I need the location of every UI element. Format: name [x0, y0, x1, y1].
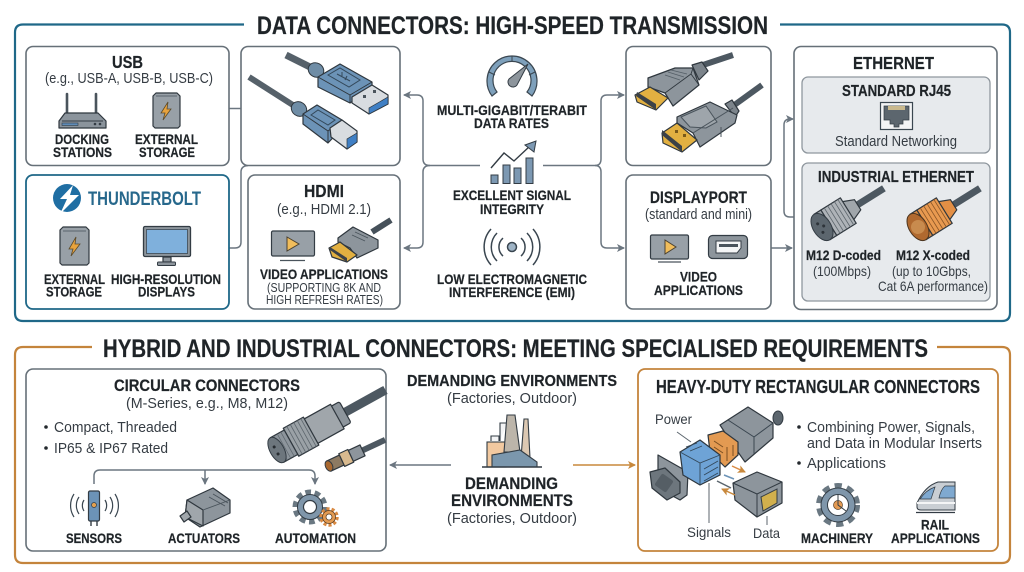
- text: HDMI version: (e.g., HDMI 2.1): [277, 201, 371, 218]
- icon: high-resolution monitor: [144, 226, 190, 266]
- text: signal integrity: [453, 187, 571, 217]
- label: video applications: VIDEO: [680, 268, 717, 284]
- label: M12 D-coded: (100Mbps): [813, 263, 871, 279]
- panel: data connectors: [15, 12, 1010, 321]
- icon: DisplayPort socket: [708, 236, 748, 258]
- label: actuators: ACTUATORS: [168, 530, 240, 546]
- panel outline: data connectors: [15, 24, 1010, 321]
- text: M-series: (M-Series, e.g., M8, M12): [126, 395, 288, 412]
- icon: docking station router: [59, 94, 106, 128]
- label: high-resolution displays: [111, 271, 221, 300]
- label: M12 D-coded: M12 D-coded: [806, 247, 881, 263]
- label: rail applications: RAIL: [921, 516, 949, 532]
- icon: actuator motor: [180, 488, 230, 527]
- label: M12 X-coded: Cat 6A performance): [878, 278, 988, 294]
- text: video applications: [260, 266, 388, 307]
- text: low EMI: [437, 271, 587, 300]
- label: external storage: EXTERNAL: [135, 131, 198, 147]
- heading: circular connectors: CIRCULAR CONNECTORS: [114, 376, 300, 395]
- text: video applications: HIGH REFRESH RATES): [266, 292, 383, 307]
- label: docking stations: STATIONS: [53, 144, 112, 160]
- panel: Thunderbolt: [26, 175, 229, 309]
- text: data rates: DATA RATES: [474, 115, 549, 131]
- label: rail applications: [891, 516, 980, 546]
- bullet list: heavy-duty features: [797, 419, 982, 472]
- subpanel: industrial Ethernet: [802, 163, 990, 301]
- text: demanding environments bottom: [447, 474, 577, 527]
- logo: Thunderbolt: THUNDERBOLT: [88, 189, 201, 210]
- bullet list: circular features: [44, 419, 177, 457]
- text: standard and mini: (standard and mini): [645, 207, 752, 223]
- subpanel: standard RJ45: [802, 77, 990, 153]
- heading: USB: USB: [112, 52, 143, 72]
- label: rail applications: APPLICATIONS: [891, 530, 980, 546]
- icon: large circular connector: [263, 376, 393, 467]
- text: data rates: [437, 102, 587, 131]
- label: signals: Signals: [687, 524, 731, 540]
- heading: DisplayPort: DISPLAYPORT: [650, 188, 747, 207]
- label: signals: [687, 483, 731, 540]
- heading: standard RJ45: STANDARD RJ45: [842, 83, 951, 100]
- panel: USB: [26, 46, 229, 166]
- icon: modular connector assembly: [650, 407, 783, 517]
- panel outline: hybrid and industrial: [15, 347, 1010, 563]
- panel: DisplayPort: [626, 175, 771, 309]
- icon: video screen: [272, 231, 314, 260]
- bullet list: heavy-duty features: Combining Power, Signals,: [807, 419, 975, 436]
- icon: small circular connector: [323, 433, 388, 474]
- text: USB types: (e.g., USB-A, USB-B, USB-C): [45, 70, 213, 87]
- text: data rates: MULTI-GIGABIT/TERABIT: [437, 102, 587, 118]
- text: demanding environments bottom: (Factories, Outdoor): [447, 510, 577, 527]
- heading: Ethernet: ETHERNET: [853, 53, 934, 73]
- text: low EMI: LOW ELECTROMAGNETIC: [437, 271, 587, 287]
- label: high-resolution displays: DISPLAYS: [138, 284, 195, 300]
- heading: HDMI: HDMI: [304, 181, 344, 201]
- text: signal integrity: INTEGRITY: [480, 201, 545, 217]
- text: signal integrity: EXCELLENT SIGNAL: [453, 187, 571, 203]
- text: demanding environments bottom: ENVIRONMENTS: [451, 491, 573, 510]
- label: power: Power: [655, 411, 692, 427]
- icon: DisplayPort plug: [662, 85, 762, 152]
- column: central benefits: [437, 56, 587, 300]
- icon: USB-B plug: [249, 77, 357, 149]
- panel: USB cables image: [241, 46, 400, 166]
- icon: speed gauge: [487, 56, 537, 96]
- icon: factory: [482, 415, 542, 467]
- icon: sensor: [71, 491, 118, 526]
- text: standard networking: Standard Networking: [835, 134, 957, 150]
- label: external storage: STORAGE: [46, 284, 102, 300]
- text: demanding environments bottom: DEMANDING: [465, 474, 558, 493]
- icon: M12 D-coded connector: [806, 176, 892, 244]
- icon: HDMI plug: [329, 220, 391, 262]
- label: high-resolution displays: HIGH-RESOLUTION: [111, 271, 221, 287]
- label: M12 X-coded: (up to 10Gbps,: [892, 263, 971, 279]
- text: low EMI: INTERFERENCE (EMI): [449, 284, 575, 300]
- label: automation: AUTOMATION: [275, 530, 356, 546]
- panel: circular connectors: [26, 369, 393, 551]
- icon: rail train: [916, 482, 955, 512]
- label: external storage: [135, 131, 198, 160]
- label: M12 D-coded: [806, 247, 881, 279]
- label: data: [753, 516, 780, 541]
- icon: M12 X-coded connector: [902, 176, 988, 244]
- heading: data connectors: DATA CONNECTORS: HIGH-SPEED TRANSMISSION: [257, 12, 768, 40]
- label: M12 X-coded: [878, 247, 988, 294]
- text: demanding environments top: [407, 373, 617, 407]
- label: M12 X-coded: M12 X-coded: [896, 247, 970, 263]
- logo: Thunderbolt: [53, 182, 201, 214]
- icon: signal chart: [491, 141, 536, 184]
- heading: industrial Ethernet: INDUSTRIAL ETHERNET: [818, 169, 974, 186]
- label: docking stations: [53, 131, 112, 160]
- label: machinery: MACHINERY: [801, 530, 874, 546]
- panel: heavy-duty rectangular connectors: [638, 369, 998, 551]
- icon: USB-A plug: [286, 55, 388, 114]
- icon: external storage: [153, 93, 180, 128]
- label: external storage: EXTERNAL: [44, 271, 105, 287]
- panel: HDMI: [248, 175, 400, 309]
- label: power: [655, 411, 692, 442]
- panel: hybrid and industrial connectors: [15, 335, 1010, 563]
- text: video applications: (SUPPORTING 8K AND: [267, 280, 381, 295]
- text: video applications: VIDEO APPLICATIONS: [260, 266, 388, 282]
- icon: machinery gear: [819, 486, 857, 524]
- icon: electromagnetic waves: [484, 229, 540, 265]
- text: demanding environments top: (Factories, Outdoor): [447, 390, 577, 407]
- label: external storage: STORAGE: [139, 144, 195, 160]
- icon: automation gears: [296, 492, 337, 525]
- icon: video screen: [650, 235, 688, 262]
- label: sensors: SENSORS: [66, 530, 122, 546]
- label: docking stations: DOCKING: [55, 131, 109, 147]
- bullet list: heavy-duty features: Applications: [807, 455, 886, 472]
- panel: HDMI and DisplayPort cables image: [626, 46, 771, 166]
- label: video applications: [654, 268, 743, 298]
- label: video applications: APPLICATIONS: [654, 282, 743, 298]
- connector: to sensors, actuators, automation: [94, 470, 315, 484]
- label: data: Data: [753, 525, 780, 541]
- icon: external storage: [60, 227, 89, 265]
- label: external storage: [44, 271, 105, 300]
- bullet list: heavy-duty features: and Data in Modular Inserts: [807, 435, 982, 452]
- bullet list: circular features: IP65 & IP67 Rated: [54, 440, 168, 457]
- panel: Ethernet: [794, 46, 997, 310]
- icon: RJ45 socket: [880, 102, 912, 130]
- connector lines: right side: [543, 95, 794, 248]
- bullet list: circular features: Compact, Threaded: [54, 419, 177, 436]
- arrow: to circular connectors: [390, 464, 451, 466]
- arrow: to heavy-duty connectors: [573, 464, 635, 466]
- connector lines: left side: [229, 95, 480, 248]
- icon: HDMI plug: [635, 55, 733, 110]
- text: demanding environments top: DEMANDING ENVIRONMENTS: [407, 373, 617, 390]
